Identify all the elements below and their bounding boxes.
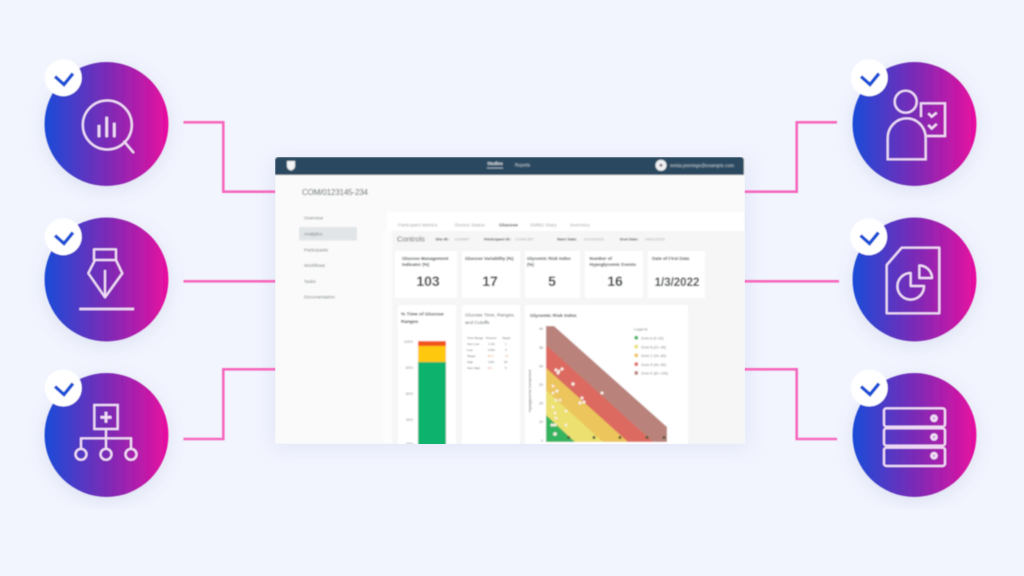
- metric card: hypoglycemic events: Hypoglycemic Events: [590, 262, 637, 267]
- icon: magnifier: [83, 100, 133, 152]
- chart panel: percent time of glucose ranges: % Time of Glucose: [401, 312, 444, 318]
- y axis labels: 30: [539, 364, 543, 368]
- icon: check mark: [45, 59, 82, 96]
- legend: Zone E (81–100): [641, 372, 668, 376]
- table panel: glucose time, ranges and cutoffs: 5: [505, 366, 507, 370]
- metric card: hypoglycemic events: 16: [607, 273, 623, 289]
- table panel: glucose time, ranges and cutoffs: Percent: [486, 336, 497, 340]
- sidebar navigation: Workflows: [304, 263, 326, 268]
- y axis labels: 15: [539, 402, 543, 406]
- icon: server rows: [884, 408, 945, 466]
- tab bar: [398, 222, 590, 228]
- chart panel: percent time of glucose ranges: 40%: [406, 418, 414, 422]
- legend: Zone A (0–20): [641, 336, 664, 340]
- icon: document pie: [887, 248, 939, 313]
- table panel: glucose time, ranges and cutoffs: Target: [467, 354, 476, 358]
- icon: check mark: [851, 370, 888, 406]
- study title: COM/0123145-234: [302, 188, 369, 197]
- tab bar: Glucose: [499, 222, 518, 228]
- metric card: glucose variability: Glucose Variability (%): [465, 256, 514, 261]
- infographic canvas: [42, 60, 979, 504]
- dashboard header bar: smita.jennings@example.com: [670, 163, 734, 168]
- tab bar: SMBG Diary: [530, 222, 557, 228]
- metric card: glucose management indicator: Indicator (%): [402, 262, 430, 267]
- chart panel: glycemic risk index: [525, 305, 688, 445]
- risk zones: [546, 326, 667, 442]
- table panel: glucose time, ranges and cutoffs: Glucose Time, Ranges,: [465, 312, 515, 318]
- y axis labels: 40: [539, 327, 543, 331]
- table panel: glucose time, ranges and cutoffs: 1.1%: [488, 342, 495, 346]
- metric card: date of first data: 1/3/2022: [655, 277, 699, 289]
- chart panel: percent time of glucose ranges: Ranges: [401, 319, 419, 325]
- metric card: glucose management indicator: Glucose Management: [402, 256, 449, 261]
- icon: check mark: [45, 370, 82, 406]
- tab bar: Device Status: [455, 222, 485, 228]
- icon: org tree: [76, 405, 136, 460]
- dashboard header bar: [275, 157, 744, 175]
- metric card: date of first data: [648, 251, 705, 298]
- table panel: glucose time, ranges and cutoffs: Target: [502, 336, 511, 340]
- chart panel: percent time of glucose ranges: 100%: [404, 340, 414, 344]
- chart panel: percent time of glucose ranges: 60%: [406, 392, 414, 396]
- table panel: glucose time, ranges and cutoffs: Very Low: [467, 342, 480, 346]
- y axis labels: [539, 327, 543, 443]
- y axis title: Hypoglycemia Component: [528, 370, 532, 412]
- legend: Zone B (21–40): [641, 345, 666, 349]
- table panel: glucose time, ranges and cutoffs: and Cutoffs: [465, 320, 490, 326]
- table panel: glucose time, ranges and cutoffs: 4: [505, 348, 507, 352]
- controls row: 01/03/2022: [584, 236, 605, 242]
- y axis labels: 35: [539, 346, 543, 350]
- controls row: 03/01/2022: [645, 236, 666, 242]
- table panel: glucose time, ranges and cutoffs: [462, 305, 520, 445]
- chart panel: percent time of glucose ranges: 20%: [406, 442, 414, 446]
- data points: [550, 368, 604, 436]
- controls row: [396, 236, 665, 242]
- y axis labels: 20: [539, 383, 543, 387]
- icon: pen nib: [79, 249, 134, 309]
- sidebar navigation: [299, 216, 357, 300]
- dashboard header bar: Studies: [487, 161, 503, 166]
- metric card: glycemic risk index: [525, 251, 580, 298]
- dashboard screenshot: [275, 157, 745, 446]
- metric card: glycemic risk index: (%): [527, 262, 534, 267]
- legend: Zone C (41–60): [641, 354, 666, 358]
- sidebar navigation: Overview: [304, 216, 324, 220]
- controls row: 12345-567: [515, 236, 535, 242]
- metric card: glycemic risk index: Glycemic Risk Index: [527, 256, 571, 261]
- table panel: glucose time, ranges and cutoffs: Time Range: [467, 336, 484, 340]
- icon: check mark: [851, 59, 888, 96]
- table panel: glucose time, ranges and cutoffs: 5.2: [488, 366, 493, 370]
- legend: Legend: [634, 326, 647, 332]
- metric card: glucose management indicator: 103: [416, 273, 440, 289]
- table panel: glucose time, ranges and cutoffs: 12%: [488, 360, 494, 364]
- tab bar: Inventory: [570, 222, 590, 228]
- icon badge: report document with pie chart: [850, 218, 976, 346]
- icon badge: magnifier with bar chart: [44, 59, 168, 190]
- metric card: glucose management indicator: [395, 251, 457, 298]
- icon badge: server stack: [851, 370, 976, 501]
- sidebar navigation: Tasks: [304, 279, 316, 284]
- icon badge: pen nib: [44, 218, 168, 346]
- icon: check mark: [45, 218, 82, 255]
- dashboard header bar: Reports: [515, 162, 530, 168]
- controls row: Site ID:: [436, 236, 449, 242]
- metric card: hypoglycemic events: Number of: [590, 256, 613, 261]
- controls row: Start Date:: [557, 236, 577, 242]
- metric card: glycemic risk index: 5: [548, 273, 556, 289]
- metric card: glucose variability: 17: [482, 273, 498, 289]
- table panel: glucose time, ranges and cutoffs: 81.1: [488, 354, 494, 358]
- icon: person and clipboard: [888, 91, 945, 159]
- legend: [634, 326, 668, 376]
- connector lines: [184, 122, 839, 439]
- controls row: End Date:: [620, 236, 639, 242]
- chart panel: percent time of glucose ranges: [398, 305, 456, 446]
- icon badge: person with checklist: [851, 59, 976, 190]
- tab bar: Participant Metrics: [398, 222, 438, 228]
- controls row: 1234567: [454, 236, 470, 242]
- table panel: glucose time, ranges and cutoffs: Very High: [467, 366, 480, 370]
- icon: check mark: [850, 218, 887, 255]
- table panel: glucose time, ranges and cutoffs: 25: [504, 360, 508, 364]
- metric card: hypoglycemic events: [585, 251, 643, 298]
- chart panel: percent time of glucose ranges: 80%: [406, 366, 414, 370]
- table panel: glucose time, ranges and cutoffs: 0.6%: [488, 348, 495, 352]
- sidebar navigation: Participants: [304, 248, 329, 252]
- sidebar navigation: Documentation: [304, 294, 335, 300]
- chart panel: glycemic risk index: Glycemic Risk Index: [530, 313, 577, 319]
- icon badge: hierarchy: [44, 370, 168, 501]
- metric card: glucose variability: [462, 251, 520, 298]
- y axis labels: 0: [541, 439, 543, 443]
- table panel: glucose time, ranges and cutoffs: 1: [505, 342, 507, 346]
- y axis labels: 10: [539, 420, 543, 424]
- controls row: Participant ID:: [484, 236, 511, 242]
- main content area: [383, 231, 744, 444]
- metric card: date of first data: Date of First Data: [652, 256, 690, 261]
- table panel: glucose time, ranges and cutoffs: 70: [505, 354, 509, 358]
- legend: Zone D (61–80): [641, 363, 666, 367]
- table panel: glucose time, ranges and cutoffs: High: [467, 360, 474, 364]
- controls row: Controls: [397, 234, 425, 244]
- sidebar navigation: Analytics: [304, 232, 323, 236]
- table panel: glucose time, ranges and cutoffs: Low: [467, 348, 473, 352]
